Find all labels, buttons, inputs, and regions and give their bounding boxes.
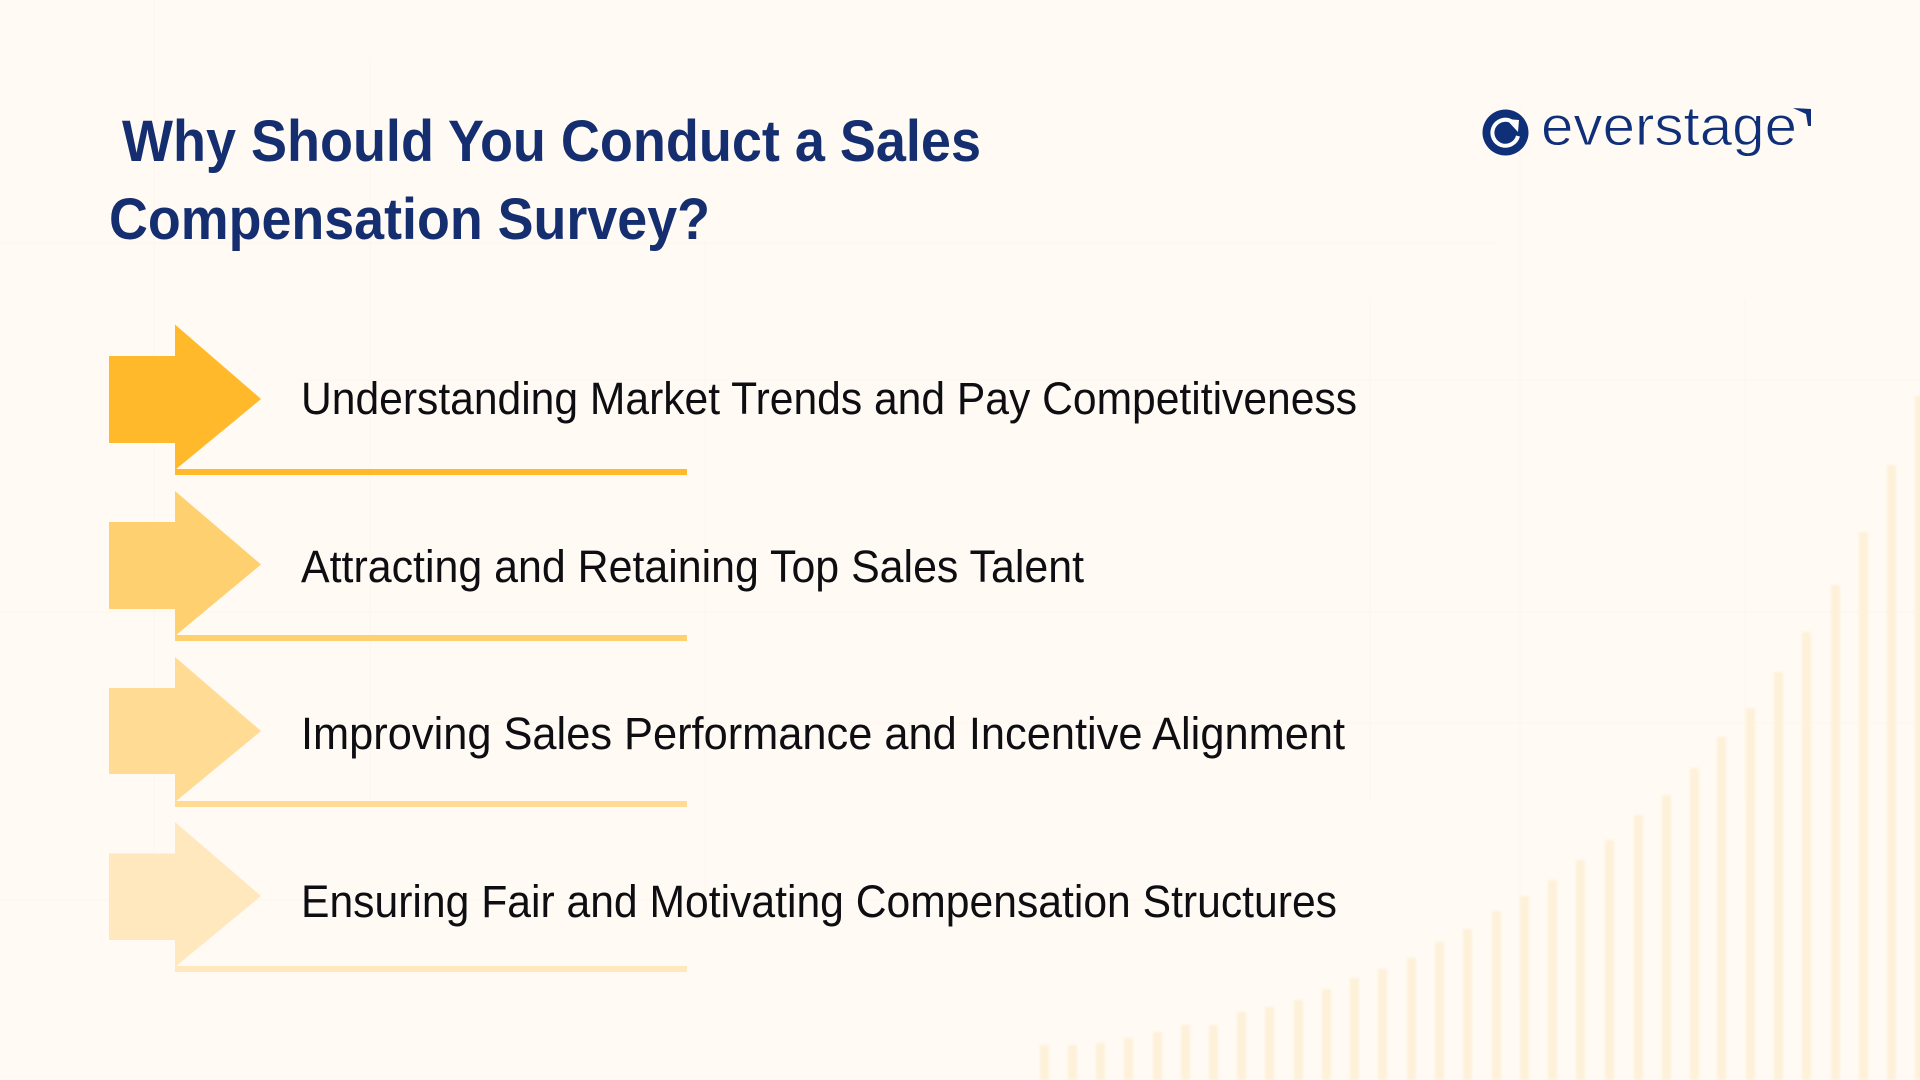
title: Compensation Survey? — [109, 187, 710, 252]
title — [109, 109, 981, 252]
underline 1 — [175, 469, 687, 475]
background bar chart — [1040, 396, 1920, 1080]
arrow 4 — [109, 822, 261, 967]
title: Why Should You Conduct a Sales — [122, 109, 981, 174]
icon: logo corner mark — [1793, 108, 1811, 126]
logo: everstage — [1482, 94, 1811, 157]
arrow 1 — [109, 324, 261, 470]
arrow 2 — [109, 491, 261, 636]
logo wordmark: everstage — [1541, 94, 1797, 157]
label 2: Attracting and Retaining Top Sales Talent — [301, 541, 1084, 592]
item 4 — [109, 822, 1337, 972]
item 3 — [109, 657, 1345, 807]
icon: logo mark — [1482, 110, 1528, 156]
underline 4 — [175, 966, 687, 972]
underline 2 — [175, 635, 687, 641]
label 4: Ensuring Fair and Motivating Compensation Structures — [301, 876, 1337, 927]
item 2 — [109, 491, 1084, 641]
arrow 3 — [109, 657, 261, 802]
label 3: Improving Sales Performance and Incentive Alignment — [301, 708, 1345, 759]
label 1: Understanding Market Trends and Pay Competitiveness — [301, 373, 1357, 424]
item 1 — [109, 324, 1357, 475]
underline 3 — [175, 801, 687, 807]
